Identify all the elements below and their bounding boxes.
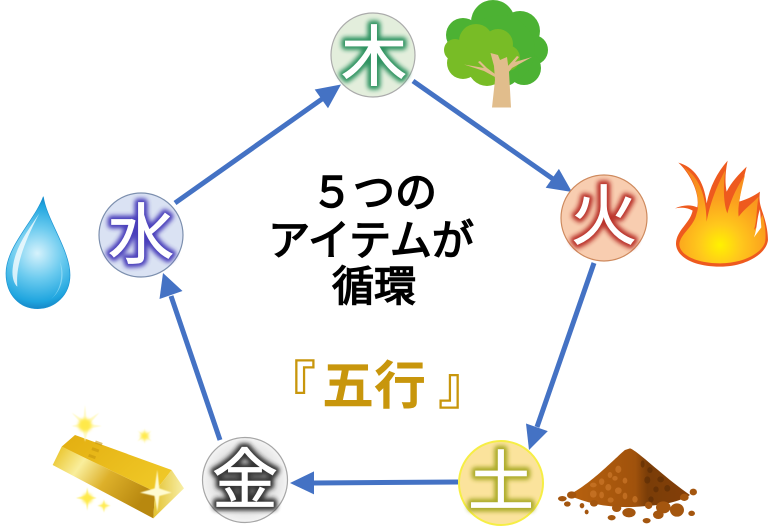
arrow: wood to fire xyxy=(413,81,572,192)
title: gogyo: 『 xyxy=(264,358,316,416)
icon: flame xyxy=(675,161,768,267)
node: water xyxy=(99,193,183,277)
arrow: water to wood xyxy=(175,84,341,203)
heading: five items cycle: アイテムが xyxy=(268,217,474,264)
icon: tree xyxy=(444,0,548,108)
node: wood xyxy=(331,13,415,97)
node: fire: 火 xyxy=(571,179,637,253)
node: wood: 木 xyxy=(341,20,407,94)
node: metal xyxy=(202,438,288,522)
node: metal: 金 xyxy=(212,443,278,517)
node: earth: 土 xyxy=(468,445,534,519)
node: metal: 金 xyxy=(212,443,278,517)
arrow: metal to water xyxy=(160,273,220,440)
title: gogyo xyxy=(264,358,490,416)
arrow: fire to earth xyxy=(526,263,594,450)
title: gogyo: 』 xyxy=(438,358,490,416)
icon: water drop xyxy=(6,197,70,309)
icon: gold bar with sparkles xyxy=(53,405,184,518)
heading: five items cycle: 循環 xyxy=(332,263,416,310)
node: wood: 木 xyxy=(341,20,407,94)
title: gogyo: 五行 xyxy=(322,358,426,416)
node: water: 水 xyxy=(108,198,174,272)
node: earth xyxy=(459,441,543,525)
icon: soil pile xyxy=(558,448,697,523)
node: fire: 火 xyxy=(571,179,637,253)
arrow: earth to metal xyxy=(290,471,458,494)
heading: five items cycle: ５つの xyxy=(311,169,437,216)
heading: five items cycle xyxy=(268,169,474,310)
node: fire xyxy=(561,175,647,261)
node: earth: 土 xyxy=(468,445,534,519)
node: water: 水 xyxy=(108,198,174,272)
